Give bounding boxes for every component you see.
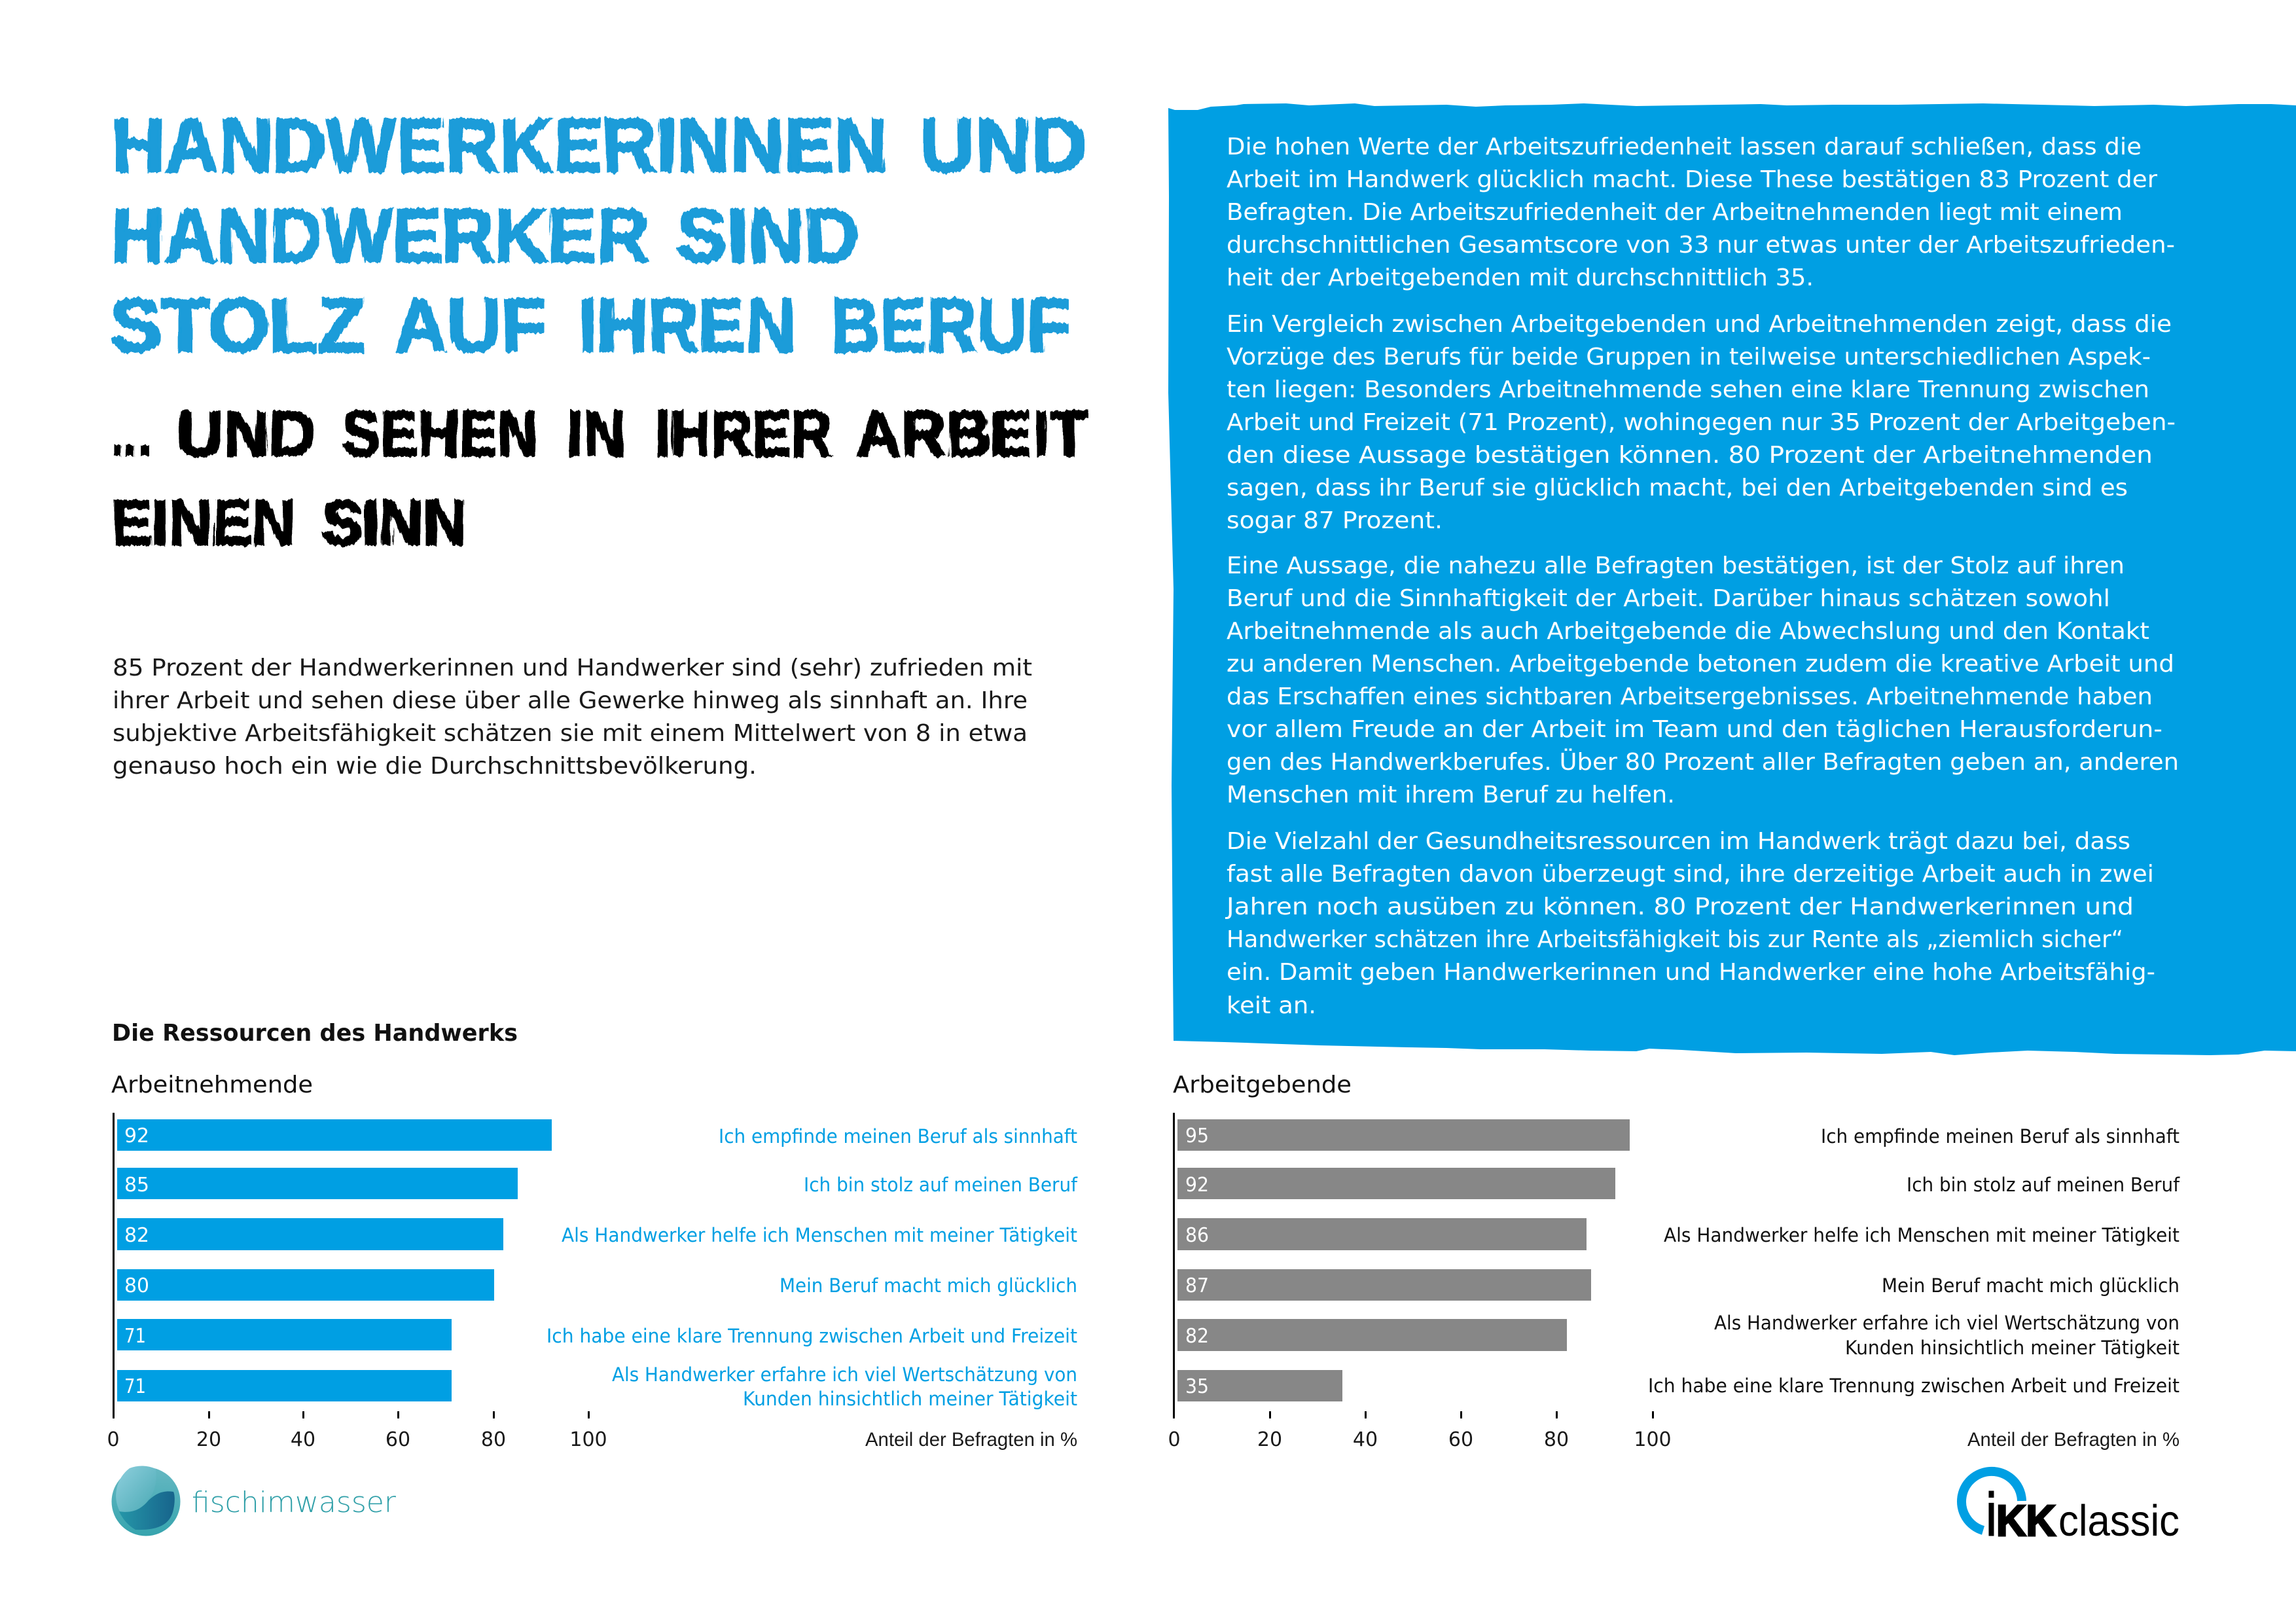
panel text: ein. Damit geben Handwerkerinnen und Handwerker eine hohe Arbeitsfähig- <box>1227 959 2155 986</box>
panel text: Handwerker schätzen ihre Arbeitsfähigkeit bis zur Rente als „ziemlich sicher“ <box>1227 926 2123 953</box>
bar chart: Arbeitnehmende: 100 <box>569 1428 607 1451</box>
title: SIND <box>676 193 859 278</box>
bar chart: Arbeitnehmende: 60 <box>386 1428 410 1451</box>
logo: IKK classic <box>1962 1471 2179 1549</box>
subtitle: IN <box>567 398 626 469</box>
bar chart: Arbeitgebende: 20 <box>1257 1428 1282 1451</box>
bar chart: Arbeitnehmende: 85 <box>124 1174 149 1197</box>
bar chart: Arbeitgebende: 40 <box>1353 1428 1378 1451</box>
bar chart: Arbeitnehmende: 82 <box>124 1224 149 1247</box>
panel text: durchschnittlichen Gesamtscore von 33 nur etwas unter der Arbeitszufrieden- <box>1227 232 2175 259</box>
panel text: gen des Handwerkberufes. Über 80 Prozent aller Befragten geben an, anderen <box>1227 748 2179 776</box>
bar chart: Arbeitgebende: 0 <box>1168 1428 1181 1451</box>
title: UND <box>920 103 1086 188</box>
bar chart: Arbeitnehmende: Ich empfinde meinen Beruf als sinnhaft <box>719 1125 1077 1147</box>
panel text: Menschen mit ihrem Beruf zu helfen. <box>1227 782 1675 808</box>
bar chart: Arbeitgebende: Kunden hinsichtlich meiner Tätigkeit <box>1845 1337 2179 1359</box>
intro text block: subjektive Arbeitsfähigkeit schätzen sie mit einem Mittelwert von 8 in etwa <box>113 720 1028 747</box>
bar chart: Arbeitnehmende: Ich bin stolz auf meinen Beruf <box>804 1174 1078 1196</box>
subtitle: SEHEN <box>342 398 538 469</box>
panel text: Vorzüge des Berufs für beide Gruppen in teilweise unterschiedlichen Aspek- <box>1227 344 2151 370</box>
panel text: sogar 87 Prozent. <box>1227 507 1443 534</box>
bar chart: Arbeitgebende: 80 <box>1544 1428 1569 1451</box>
bar chart: Arbeitnehmende <box>107 1113 1078 1451</box>
title <box>110 103 1086 368</box>
subtitle: ARBEIT <box>856 398 1088 469</box>
subtitle: EINEN <box>111 487 295 558</box>
bar chart: Arbeitgebende: 35 <box>1185 1375 1209 1398</box>
panel text: Arbeit im Handwerk glücklich macht. Diese These bestätigen 83 Prozent der <box>1227 166 2157 193</box>
bar chart: Arbeitnehmende: 0 <box>107 1428 120 1451</box>
subtitle: ... <box>110 398 152 469</box>
subtitle <box>110 398 1088 558</box>
intro text block: ihrer Arbeit und sehen diese über alle Gewerke hinweg als sinnhaft an. Ihre <box>113 687 1028 714</box>
bar chart: Arbeitgebende: Ich habe eine klare Trennung zwischen Arbeit und Freizeit <box>1648 1375 2179 1397</box>
logo: fischimwasser <box>111 1466 397 1536</box>
panel text: zu anderen Menschen. Arbeitgebende betonen zudem die kreative Arbeit und <box>1227 651 2174 677</box>
bar chart: Arbeitnehmende: 71 <box>124 1375 146 1398</box>
section heading: Die Ressourcen des Handwerks <box>112 1020 518 1047</box>
panel text: den diese Aussage bestätigen können. 80 Prozent der Arbeitnehmenden <box>1227 442 2153 469</box>
panel text: Die Vielzahl der Gesundheitsressourcen im Handwerk trägt dazu bei, dass <box>1227 828 2130 855</box>
bar chart: Arbeitgebende: Als Handwerker helfe ich Menschen mit meiner Tätigkeit <box>1664 1224 2179 1246</box>
logo: IKK classic: KK <box>1996 1496 2056 1545</box>
logo: IKK classic: i <box>1986 1480 1996 1549</box>
title: AUF <box>393 283 547 368</box>
panel text: Arbeitnehmende als auch Arbeitgebende die Abwechslung und den Kontakt <box>1227 618 2149 645</box>
title: STOLZ <box>110 283 365 368</box>
bar chart: Arbeitgebende <box>1168 1113 2180 1451</box>
bar chart: Arbeitnehmende: Als Handwerker erfahre ich viel Wertschätzung von <box>612 1363 1077 1386</box>
bar chart: Arbeitgebende: 100 <box>1634 1428 1672 1451</box>
intro text block: 85 Prozent der Handwerkerinnen und Handwerker sind (sehr) zufrieden mit <box>113 655 1032 681</box>
panel text: sagen, dass ihr Beruf sie glücklich macht, bei den Arbeitgebenden sind es <box>1227 475 2128 501</box>
panel: blue text panel <box>1168 103 2296 1055</box>
panel text: Die hohen Werte der Arbeitszufriedenheit lassen darauf schließen, dass die <box>1227 134 2142 160</box>
bar chart: Arbeitnehmende: 80 <box>481 1428 506 1451</box>
bar chart: Arbeitgebende: Mein Beruf macht mich glücklich <box>1882 1274 2179 1297</box>
panel text: Ein Vergleich zwischen Arbeitgebenden und Arbeitnehmenden zeigt, dass die <box>1227 311 2172 338</box>
bar chart: Arbeitnehmende: 92 <box>124 1125 149 1147</box>
title: HANDWERKERINNEN <box>111 103 888 188</box>
bar chart: Arbeitnehmende: Ich habe eine klare Trennung zwischen Arbeit und Freizeit <box>547 1325 1077 1347</box>
chart heading: Arbeitgebende: Arbeitgebende <box>1173 1072 1352 1098</box>
subtitle: IHRER <box>654 398 832 469</box>
logo: IKK classic: classic <box>2058 1496 2179 1545</box>
bar chart: Arbeitgebende: 82 <box>1185 1325 1209 1348</box>
intro text block <box>113 655 1032 780</box>
panel text: Jahren noch ausüben zu können. 80 Prozent der Handwerkerinnen und <box>1225 893 2134 920</box>
bar chart: Arbeitgebende: 87 <box>1185 1274 1209 1297</box>
bar chart: Arbeitgebende: 92 <box>1185 1174 1209 1197</box>
bar chart: Arbeitgebende: 60 <box>1448 1428 1473 1451</box>
bar chart: Arbeitgebende: 86 <box>1185 1224 1209 1247</box>
bar chart: Arbeitnehmende: 80 <box>124 1274 149 1297</box>
bar chart: Arbeitnehmende: Mein Beruf macht mich glücklich <box>780 1274 1077 1297</box>
bar chart: Arbeitnehmende: Als Handwerker helfe ich Menschen mit meiner Tätigkeit <box>562 1224 1077 1246</box>
bar chart: Arbeitnehmende: Kunden hinsichtlich meiner Tätigkeit <box>743 1388 1077 1410</box>
bar chart: Arbeitgebende: Als Handwerker erfahre ich viel Wertschätzung von <box>1714 1312 2179 1334</box>
panel text: ten liegen: Besonders Arbeitnehmende sehen eine klare Trennung zwischen <box>1227 376 2149 403</box>
title: HANDWERKER <box>111 193 649 278</box>
panel text: Befragten. Die Arbeitszufriedenheit der Arbeitnehmenden liegt mit einem <box>1227 199 2123 226</box>
panel text: Beruf und die Sinnhaftigkeit der Arbeit. Darüber hinaus schätzen sowohl <box>1227 585 2110 612</box>
bar chart: Arbeitnehmende: Anteil der Befragten in % <box>865 1429 1077 1451</box>
subtitle: UND <box>177 398 315 469</box>
bar chart: Arbeitgebende: Ich empfinde meinen Beruf als sinnhaft <box>1821 1125 2179 1147</box>
panel text: fast alle Befragten davon überzeugt sind, ihre derzeitige Arbeit auch in zwei <box>1227 861 2154 888</box>
bar chart: Arbeitnehmende: 40 <box>291 1428 315 1451</box>
panel text: Arbeit und Freizeit (71 Prozent), wohingegen nur 35 Prozent der Arbeitgeben- <box>1227 409 2176 436</box>
panel text: keit an. <box>1227 992 1316 1019</box>
panel text <box>1225 134 2179 1019</box>
panel text: das Erschaffen eines sichtbaren Arbeitsergebnisses. Arbeitnehmende haben <box>1227 683 2153 710</box>
bar chart: Arbeitgebende: 95 <box>1185 1125 1209 1147</box>
bar chart: Arbeitgebende: Anteil der Befragten in % <box>1967 1429 2179 1451</box>
logo: fischimwasser: fischimwasser <box>192 1486 397 1519</box>
panel text: Eine Aussage, die nahezu alle Befragten bestätigen, ist der Stolz auf ihren <box>1227 552 2125 579</box>
panel text: vor allem Freude an der Arbeit im Team und den täglichen Herausforderun- <box>1227 716 2162 743</box>
title: BERUF <box>830 283 1070 368</box>
intro text block: genauso hoch ein wie die Durchschnittsbevölkerung. <box>113 753 757 780</box>
bar chart: Arbeitgebende: Ich bin stolz auf meinen Beruf <box>1907 1174 2180 1196</box>
panel text: heit der Arbeitgebenden mit durchschnittlich 35. <box>1227 264 1814 291</box>
title: IHREN <box>578 283 796 368</box>
bar chart: Arbeitnehmende: 71 <box>124 1325 146 1348</box>
bar chart: Arbeitnehmende: 20 <box>196 1428 221 1451</box>
chart heading: Arbeitnehmende: Arbeitnehmende <box>111 1072 313 1098</box>
subtitle: SINN <box>322 487 467 558</box>
